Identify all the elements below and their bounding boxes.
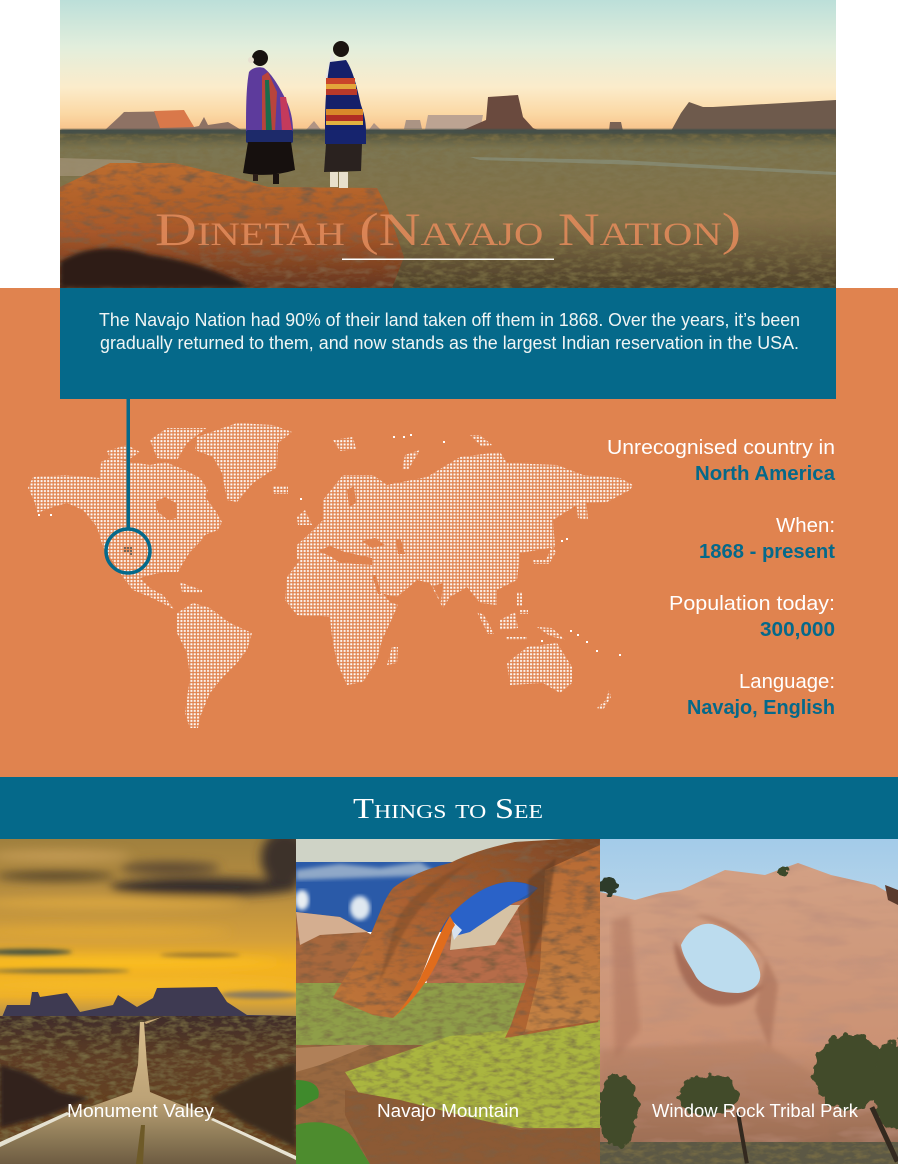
- woman left in purple robe: [243, 50, 295, 184]
- fact: when: When:: [776, 514, 835, 537]
- distant mesas: [95, 95, 836, 131]
- intro text panel: The Navajo Nation had 90% of their land taken off them in 1868. Over the years, it’s been: [99, 310, 800, 330]
- fact: population: [669, 592, 835, 641]
- facts column: [607, 436, 836, 719]
- photo: Monument Valley: [0, 830, 309, 1164]
- Eurasia: [297, 452, 633, 608]
- fact: language: Navajo, English: [687, 696, 835, 719]
- foreground rock: [60, 163, 404, 288]
- title: Dinetah (Navajo Nation): [155, 204, 741, 256]
- photo: Window Rock Tribal Park: [598, 839, 898, 1164]
- islands: [273, 435, 611, 710]
- scattered dots: [38, 434, 621, 656]
- section band: Things to See: [0, 777, 898, 839]
- fact: status: North America: [695, 462, 836, 485]
- Africa: [285, 557, 398, 685]
- vegetation and ground: [296, 983, 526, 1045]
- section band: Things to See: Things to See: [353, 793, 543, 825]
- intro text panel: gradually returned to them, and now stands as the largest Indian reservation in the USA.: [100, 333, 799, 353]
- caption: Navajo Mountain: [377, 1101, 519, 1121]
- fact: status: Unrecognised country in: [607, 436, 835, 459]
- orange background panel: [0, 288, 898, 777]
- fact: when: 1868 - present: [699, 540, 835, 563]
- fact: when: [699, 514, 835, 563]
- location marker with leader line: [106, 399, 150, 573]
- trees: [598, 1034, 898, 1164]
- fact: language: [687, 670, 835, 719]
- stone arch and right mass: [333, 839, 600, 1038]
- fact: population: 300,000: [760, 618, 835, 641]
- South America: [177, 603, 252, 728]
- shading around the window: [675, 940, 765, 1006]
- Greenland: [195, 423, 292, 502]
- North America: [28, 428, 222, 610]
- dotted world map: [28, 423, 633, 728]
- fact: population: Population today:: [669, 592, 835, 615]
- background cliff and left rock: [296, 912, 371, 983]
- fact: status: [607, 436, 836, 485]
- inland seas: [318, 486, 443, 603]
- caption: Monument Valley: [67, 1101, 214, 1121]
- woman right in striped robe: [324, 41, 366, 188]
- ground: [600, 1142, 898, 1164]
- intro text panel: [60, 288, 836, 399]
- fact: language: Language:: [739, 670, 835, 693]
- Hudson Bay: [155, 497, 176, 520]
- hero photograph: Monument Valley with two Navajo women: [60, 0, 836, 288]
- opening sky: [449, 882, 538, 936]
- window opening: [681, 924, 760, 993]
- caption: Window Rock Tribal Park: [652, 1101, 859, 1121]
- photo: Navajo Mountain: [295, 839, 600, 1164]
